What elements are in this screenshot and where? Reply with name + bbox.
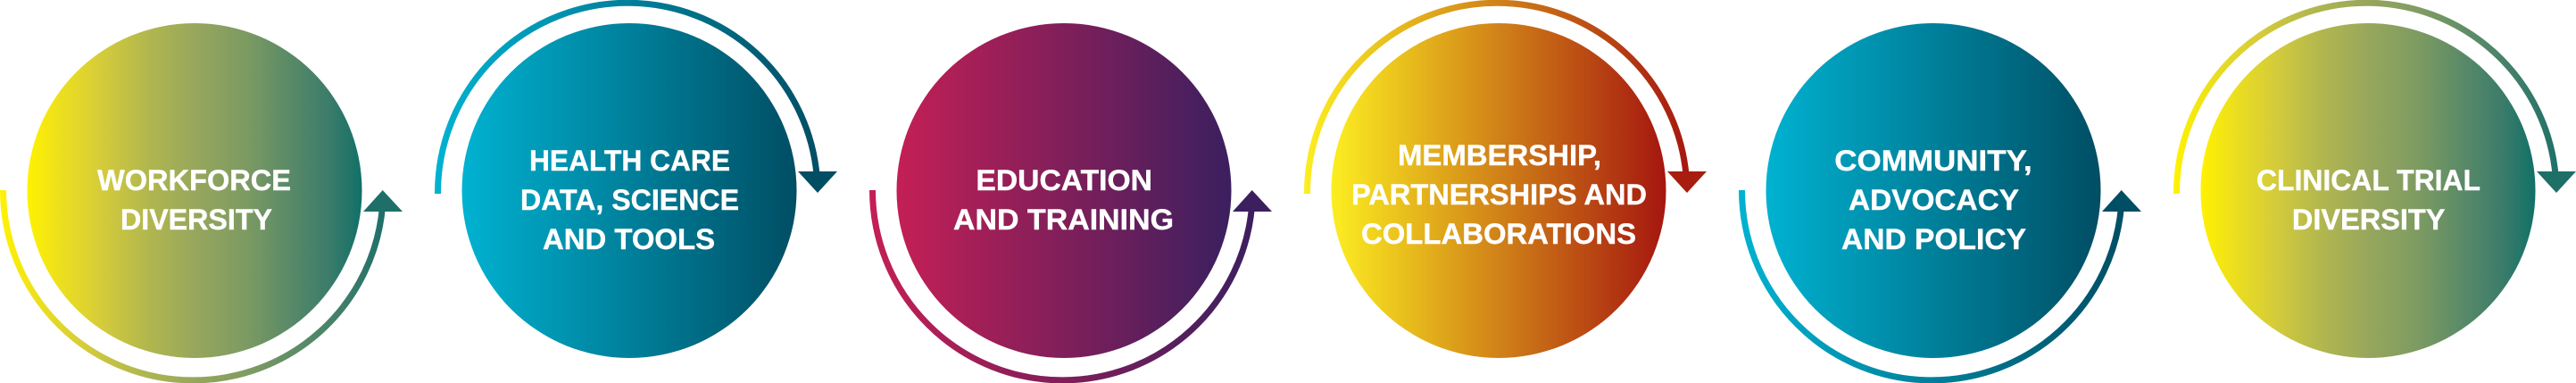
label: education and training [953,164,1174,236]
arrow: curved over circle pointing down [2176,3,2576,194]
arrow: curved under circle pointing up [1742,190,2141,380]
label: clinical trial diversity [2256,164,2480,236]
label: health care data, science and tools: AND TOOLS [543,223,715,255]
panel: education and training [873,23,1272,380]
label: health care data, science and tools: DATA, SCIENCE [520,184,739,216]
label: membership, partnerships and collaborations: COLLABORATIONS [1361,218,1636,250]
arrow: curved under circle pointing up [873,190,1272,380]
label: health care data, science and tools [520,145,739,255]
arrow: curved over circle pointing down [437,3,837,194]
arrow: curved over circle pointing down [1307,3,1707,194]
label: membership, partnerships and collaborations [1351,139,1647,250]
label: workforce diversity: WORKFORCE [97,164,291,196]
label: clinical trial diversity: CLINICAL TRIAL [2256,164,2480,196]
label: workforce diversity [97,164,291,236]
label: community, advocacy and policy: COMMUNITY, [1834,145,2032,177]
circle: membership [1332,23,1666,358]
arrow: curved under circle pointing up [4,190,403,380]
circle: community [1766,23,2101,358]
panel: community, advocacy and policy [1742,23,2141,380]
circle: workforce diversity [27,23,362,358]
panel: membership, partnerships and collaborations [1307,3,1707,358]
label: workforce diversity: DIVERSITY [120,204,272,236]
circle: education and training [896,23,1232,358]
label: education and training: AND TRAINING [953,204,1174,236]
circle: clinical trial diversity [2201,23,2535,358]
label: community, advocacy and policy: ADVOCACY [1849,184,2019,216]
panel: workforce diversity [4,23,403,380]
label: education and training: EDUCATION [976,164,1152,196]
label: membership, partnerships and collaborations: PARTNERSHIPS AND [1351,179,1647,211]
panel: clinical trial diversity [2176,3,2576,358]
label: community, advocacy and policy: AND POLICY [1841,223,2026,255]
label: clinical trial diversity: DIVERSITY [2292,204,2445,236]
circle: health care data [462,23,796,358]
label: health care data, science and tools: HEALTH CARE [529,145,730,177]
label: community, advocacy and policy [1834,145,2032,255]
label: membership, partnerships and collaborations: MEMBERSHIP, [1398,139,1601,171]
panel: health care data, science and tools [437,3,837,358]
